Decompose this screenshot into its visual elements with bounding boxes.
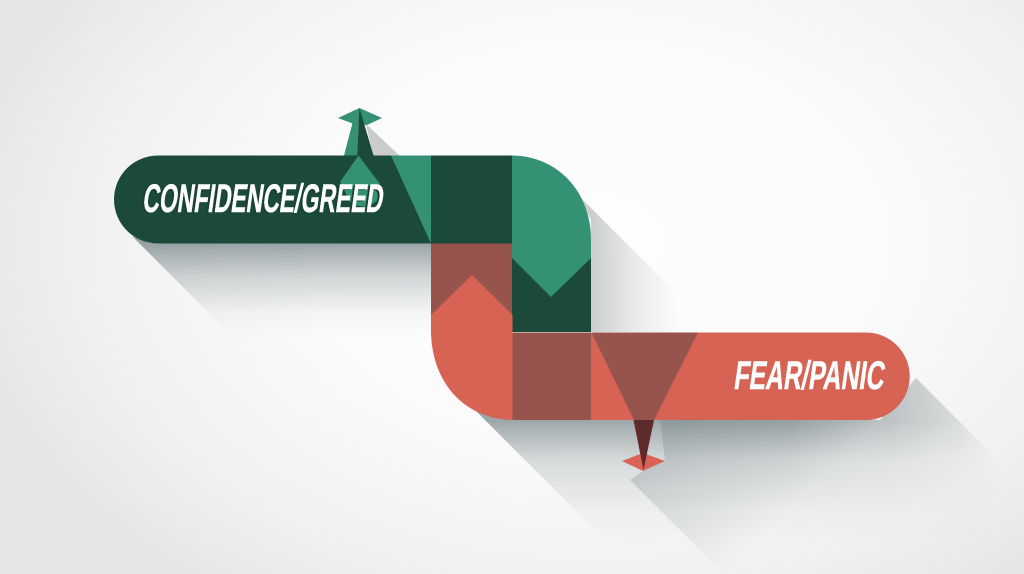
red bend [431,275,512,420]
long shadow: bottom arrow [630,418,900,574]
flow ribbon [114,156,910,420]
icon: up arrow [338,108,382,156]
green wedge [391,156,431,244]
arrow diamond [622,453,665,471]
arrow head [338,108,382,125]
arrow stem [344,108,360,156]
brown square upper left [431,244,512,334]
green bar segment [114,156,431,244]
label: confidence/greed: CONFIDENCE/GREED [139,177,385,222]
arrow stem [634,420,654,470]
long shadow: green bar [132,236,431,344]
brown inverted triangle [592,332,698,420]
dark square [431,156,512,244]
green bend [512,156,591,297]
icon: down arrow [622,420,665,471]
green triangle inside bar [340,156,380,207]
long shadow: red bar [476,378,980,510]
label: confidence/greed: CONFIDENCE/GREED [141,176,387,221]
arrow stem dark side [357,108,374,156]
red bar segment [591,332,910,420]
long shadow: green bend [578,195,690,332]
long shadow: top arrow [366,124,400,156]
brown square lower [512,332,592,420]
dark lower bend square [512,240,591,332]
label: fear/panic: FEAR/PANIC [732,353,888,398]
label: confidence/greed [139,176,387,222]
